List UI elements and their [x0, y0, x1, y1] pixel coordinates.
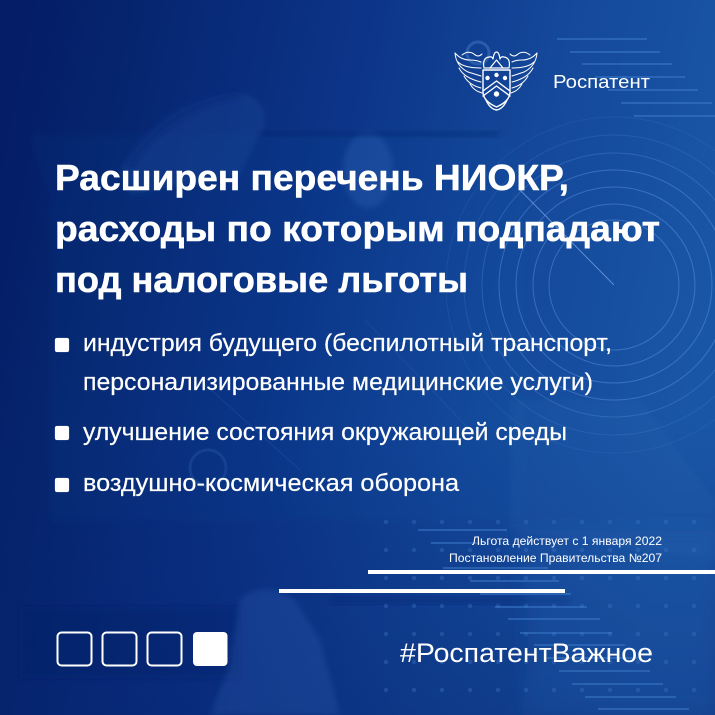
- background: faint small circles and diagonal lines: [190, 42, 489, 486]
- title: расходы по которым подпадают: [55, 208, 660, 249]
- hashtag: #РоспатентВажное: [400, 638, 653, 668]
- logo wordmark: Роспатент: [553, 72, 650, 92]
- title: Расширен перечень НИОКР,: [55, 157, 569, 198]
- title: [55, 157, 660, 300]
- pagination squares: [58, 632, 228, 666]
- logo: Rospatent emblem: [455, 52, 537, 110]
- bullet 3: воздушно-космическая оборона: [83, 470, 460, 497]
- bullet 1: индустрия будущего (беспилотный транспорт,: [83, 330, 612, 357]
- footnote: [449, 534, 662, 565]
- title: под налоговые льготы: [55, 259, 468, 300]
- emblem left wing: [455, 52, 482, 93]
- bullet 2: улучшение состояния окружающей среды: [83, 419, 567, 446]
- white line lower: [279, 589, 565, 593]
- bullet 1: персонализированные медицинские услуги): [83, 369, 593, 396]
- background: concentric circles: [446, 117, 715, 453]
- white line upper: [368, 570, 715, 574]
- bullet 1: [55, 330, 612, 396]
- emblem shield: [483, 70, 510, 110]
- background: dot grid: [370, 520, 715, 715]
- emblem crown: [484, 52, 509, 68]
- emblem right wing: [510, 52, 537, 93]
- bullet list: [55, 330, 612, 497]
- footnote: Постановление Правительства №207: [449, 551, 662, 565]
- background: dashes: [418, 39, 715, 709]
- footnote: Льгота действует с 1 января 2022: [472, 534, 662, 548]
